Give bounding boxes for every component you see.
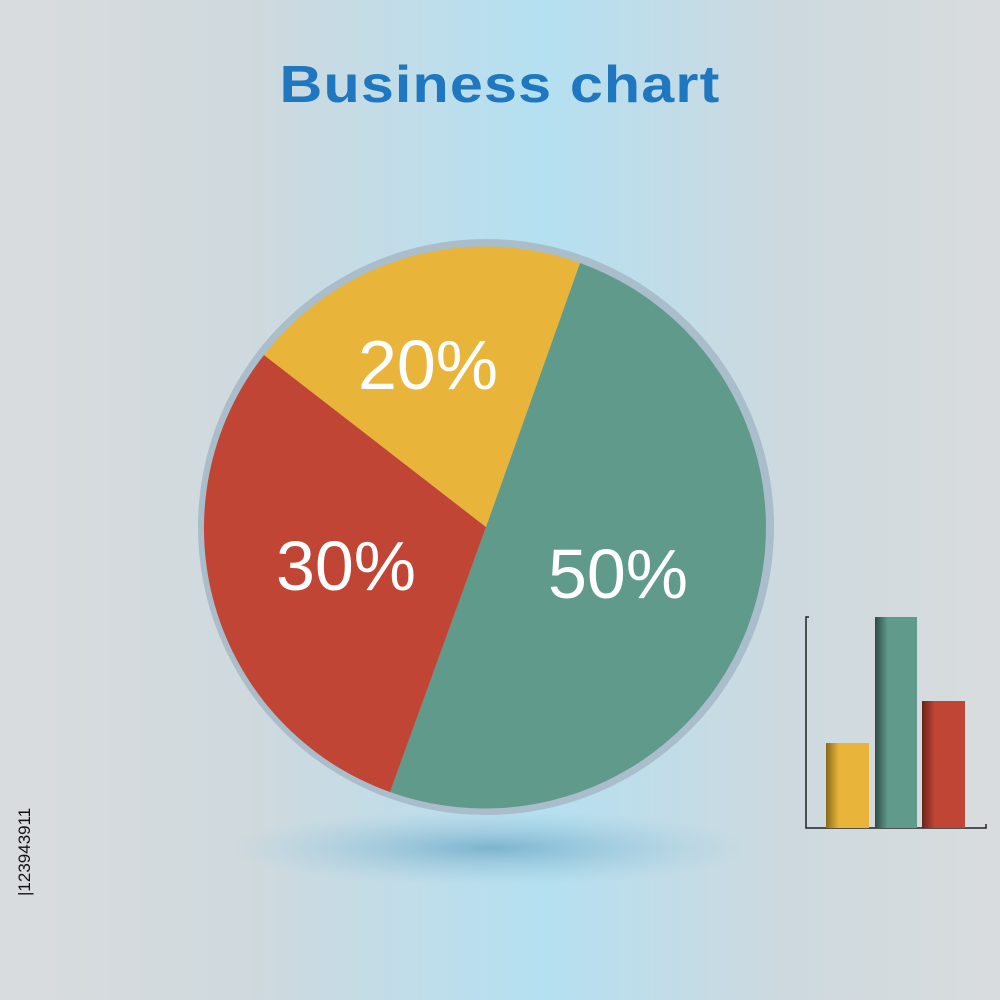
label 20%: 20% <box>358 326 498 404</box>
bar yellow <box>826 743 869 828</box>
title: Business chart <box>280 56 720 114</box>
pie ring <box>198 239 774 815</box>
bar red <box>922 701 965 828</box>
slice: 50% green <box>390 263 766 809</box>
slice: 20% yellow <box>264 247 580 527</box>
bar chart <box>806 617 986 828</box>
side id text: |123943911 <box>15 808 34 896</box>
label 50%: 50% <box>548 535 688 613</box>
label 30%: 30% <box>276 527 416 605</box>
bar green <box>875 617 917 828</box>
shadow <box>230 810 750 886</box>
slice: 30% red <box>204 355 486 792</box>
